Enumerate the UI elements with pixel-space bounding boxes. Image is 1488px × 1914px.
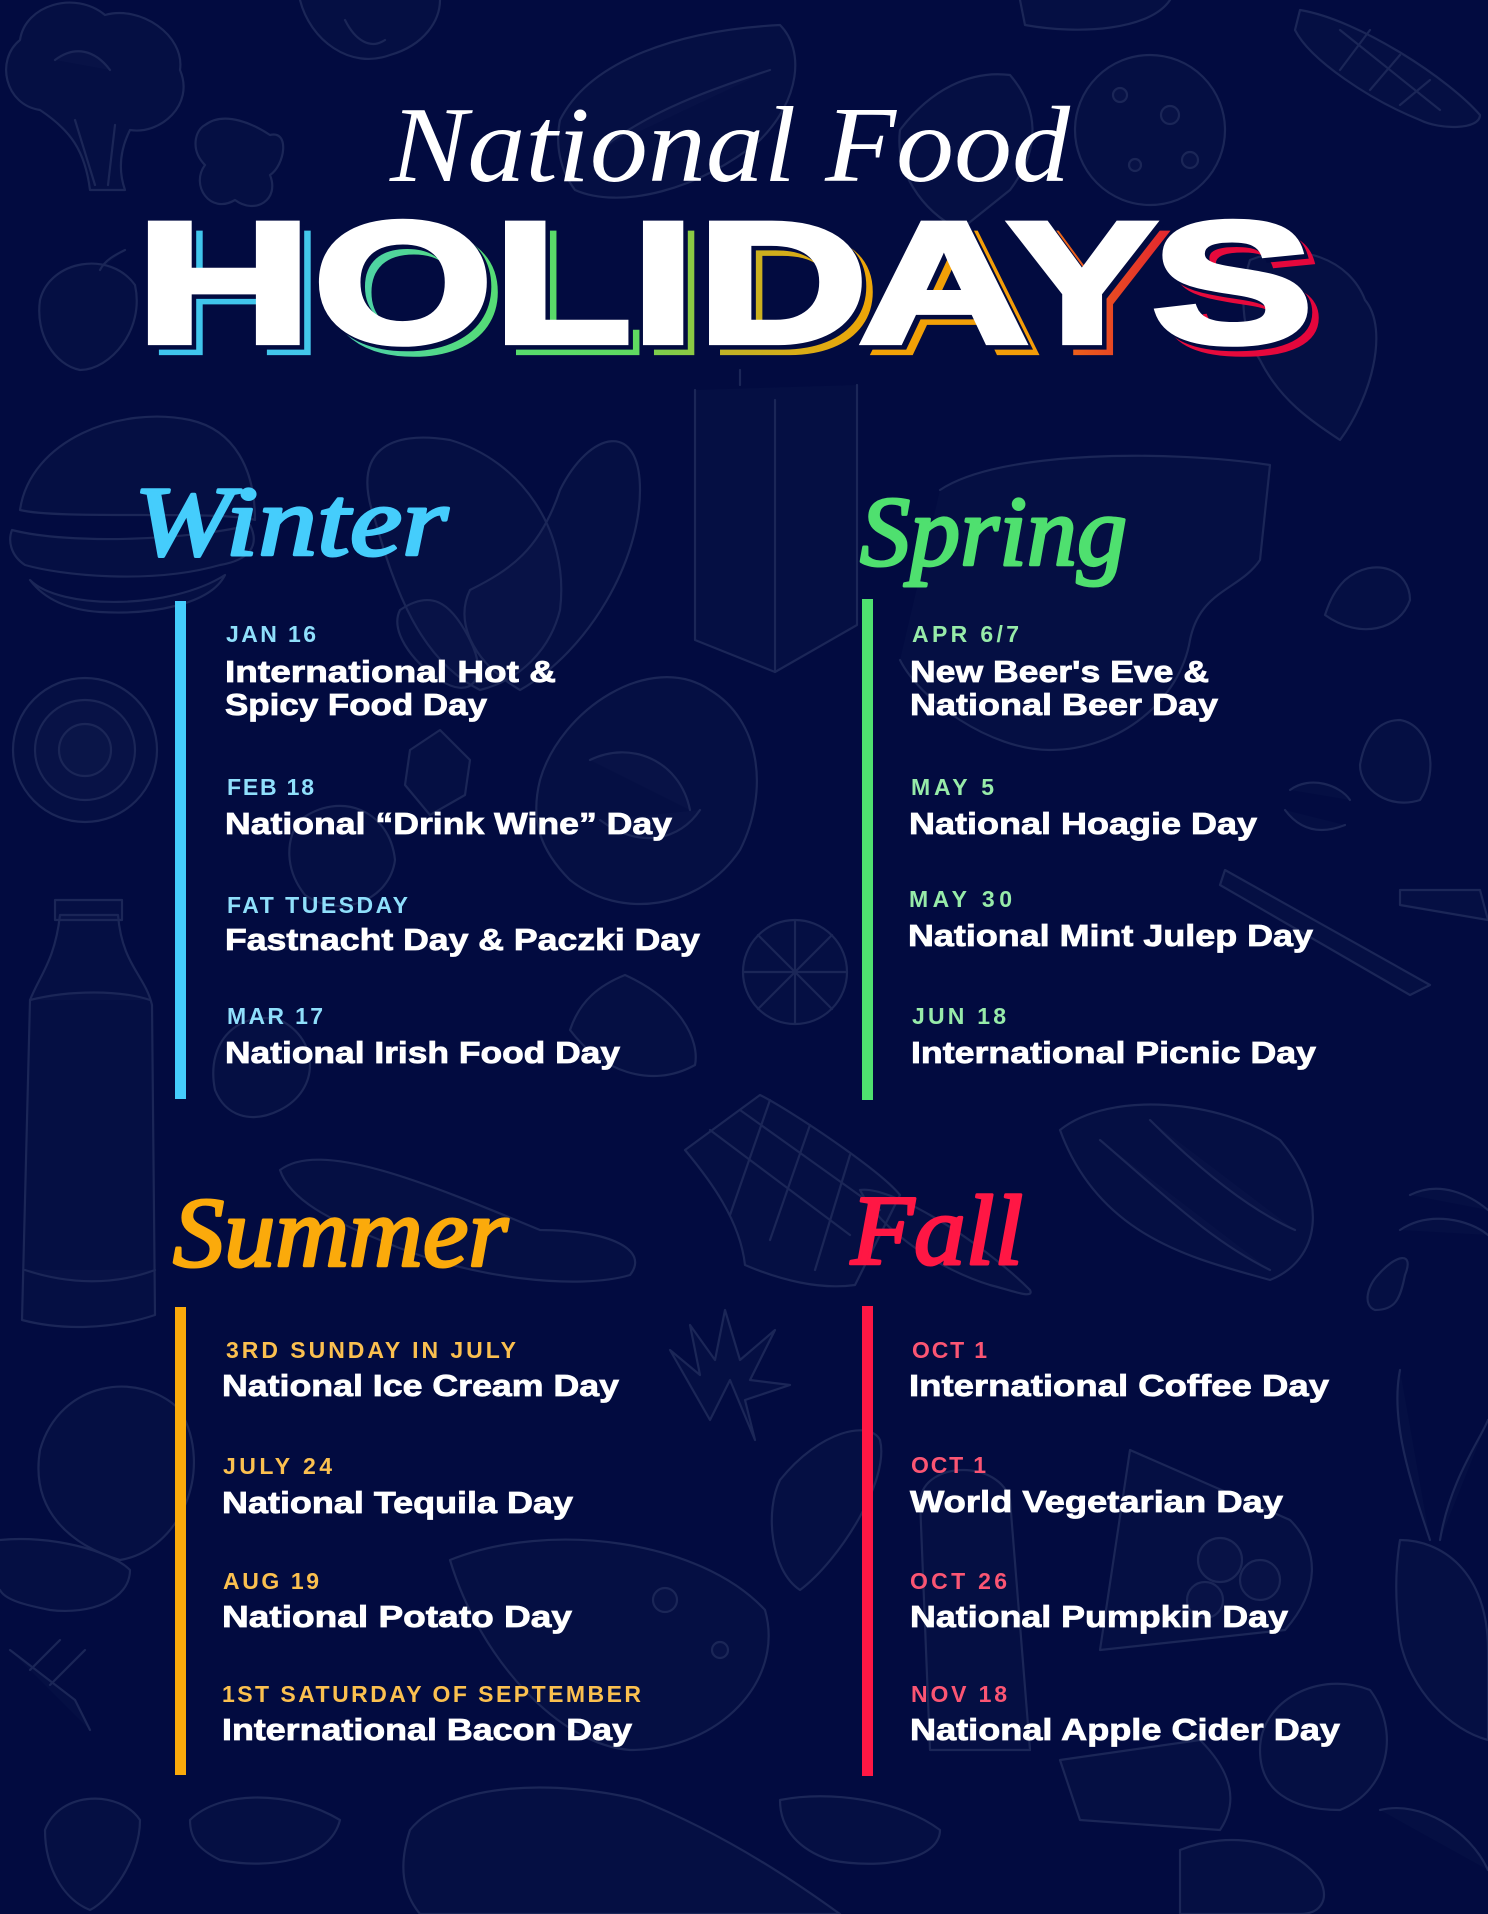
letter H: H — [147, 196, 323, 389]
title line: HOLIDAYS — [136, 186, 1324, 389]
panel: Spring — [860, 476, 1317, 1100]
letter H: H — [136, 186, 312, 379]
holiday: Oct 1 coffee — [909, 1337, 1330, 1403]
holiday: Oct 26 — [910, 1568, 1289, 1634]
letter Y: Y — [1008, 187, 1156, 379]
holiday: Aug 19: AUG 19 — [223, 1568, 319, 1594]
holiday: Apr 6/7 — [910, 621, 1219, 722]
holiday: Aug 19: National Potato Day — [222, 1599, 573, 1634]
holiday: Feb 18: National “Drink Wine” Day — [225, 806, 673, 841]
title — [136, 86, 1324, 389]
letter O: O — [314, 187, 492, 379]
letter Y: Y — [1012, 191, 1161, 384]
holiday: May 5 — [909, 774, 1258, 841]
letter S: S — [1152, 187, 1313, 379]
letter D: D — [702, 190, 872, 383]
holiday: Feb 18: FEB 18 — [227, 774, 314, 800]
heading: Spring: Spring — [860, 476, 1127, 587]
vertical bar: Fall — [862, 1306, 873, 1776]
heading: Fall: Fall — [850, 1175, 1023, 1286]
letter D: D — [708, 196, 878, 389]
letter I: I — [632, 187, 694, 379]
holiday: July 24: JULY 24 — [223, 1453, 332, 1479]
holiday: May 5: National Hoagie Day — [909, 806, 1258, 841]
holiday: Jan 16: International Hot & — [225, 654, 556, 689]
holiday: Feb 18 — [225, 774, 673, 841]
holiday: Mar 17: National Irish Food Day — [225, 1035, 621, 1070]
holiday: Mar 17 — [225, 1003, 621, 1070]
letter S: S — [1156, 191, 1317, 383]
holiday: Jan 16 — [225, 621, 556, 722]
letter S: S — [1163, 197, 1324, 389]
holiday: Oct 1 coffee: International Coffee Day — [909, 1368, 1330, 1403]
holiday: May 30 — [908, 886, 1314, 953]
letter Y: Y — [1019, 197, 1167, 389]
holiday: 3rd Sunday in July: National Ice Cream Day — [222, 1368, 620, 1403]
holiday: Jan 16: JAN 16 — [226, 621, 316, 647]
vertical bar: Spring — [862, 599, 873, 1100]
panel: Summer — [173, 1177, 641, 1775]
vertical bar: Summer — [175, 1307, 186, 1775]
holiday: Oct 26: OCT 26 — [910, 1568, 1007, 1594]
holiday: Fat Tuesday: Fastnacht Day & Paczki Day — [225, 922, 701, 957]
holiday: Nov 18 — [910, 1681, 1341, 1747]
letter L: L — [498, 192, 636, 383]
holiday: Oct 1 vegetarian: OCT 1 — [911, 1452, 986, 1478]
holiday: Apr 6/7: APR 6/7 — [912, 621, 1019, 647]
holiday: Jan 16: Spicy Food Day — [225, 687, 488, 722]
holiday: Fat Tuesday — [225, 892, 701, 957]
holiday: May 30: MAY 30 — [909, 886, 1012, 912]
holiday: Oct 1 vegetarian — [910, 1452, 1284, 1519]
holiday: May 30: National Mint Julep Day — [908, 918, 1314, 953]
holiday: Oct 1 coffee: OCT 1 — [912, 1337, 987, 1363]
holiday: 1st Saturday of September: 1ST SATURDAY OF SEPTEMBER — [222, 1681, 641, 1707]
holiday: Oct 1 vegetarian: World Vegetarian Day — [910, 1484, 1284, 1519]
holiday: 1st Saturday of September — [222, 1681, 641, 1747]
letter A: A — [864, 191, 1033, 383]
holiday: July 24 — [222, 1453, 574, 1520]
letter A: A — [859, 187, 1029, 379]
holiday: Oct 26: National Pumpkin Day — [910, 1599, 1289, 1634]
heading: Summer: Summer — [173, 1177, 509, 1288]
holiday: Mar 17: MAR 17 — [227, 1003, 323, 1029]
holiday: Fat Tuesday: FAT TUESDAY — [227, 892, 408, 918]
holiday: July 24: National Tequila Day — [222, 1485, 574, 1520]
letter A: A — [870, 197, 1040, 389]
holiday: Jun 18: JUN 18 — [912, 1003, 1006, 1029]
holiday: Nov 18: NOV 18 — [911, 1681, 1007, 1707]
holiday: Apr 6/7: New Beer's Eve & — [910, 654, 1209, 689]
holiday: Apr 6/7: National Beer Day — [910, 687, 1219, 722]
letter O: O — [325, 197, 503, 389]
vertical bar: Winter — [175, 601, 186, 1099]
panel: Winter — [134, 466, 701, 1099]
holiday: 3rd Sunday in July — [222, 1337, 620, 1403]
title line: National Food: National Food — [389, 86, 1071, 205]
holiday: 1st Saturday of September: International Bacon Day — [222, 1712, 633, 1747]
letter H: H — [140, 191, 316, 383]
holiday: Jun 18: International Picnic Day — [911, 1035, 1317, 1070]
holiday: Jun 18 — [911, 1003, 1317, 1070]
holiday: 3rd Sunday in July: 3RD SUNDAY IN JULY — [226, 1337, 516, 1363]
holiday: May 5: MAY 5 — [911, 774, 994, 800]
letter I: I — [643, 197, 705, 389]
panel: Fall — [850, 1175, 1341, 1776]
letter I: I — [636, 192, 699, 384]
holiday: Aug 19 — [222, 1568, 573, 1634]
letter O: O — [318, 191, 497, 384]
letter L: L — [505, 197, 642, 389]
letter D: D — [698, 186, 867, 379]
letter L: L — [494, 187, 631, 379]
holiday: Nov 18: National Apple Cider Day — [910, 1712, 1341, 1747]
heading: Winter: Winter — [134, 466, 449, 577]
